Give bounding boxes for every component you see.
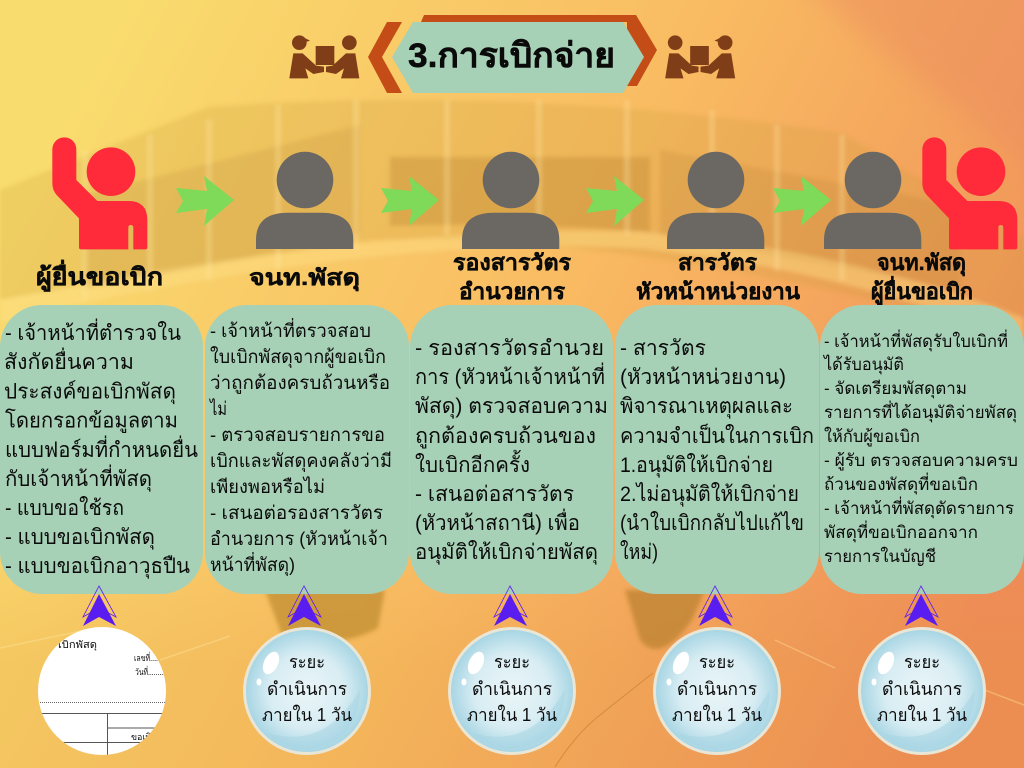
panel 2: supply officer: ไม่ [208, 398, 227, 419]
panel 5: officer and applicant: ได้รับอนุมัติ [822, 354, 904, 375]
form image circle [38, 627, 166, 760]
bubble 3 [654, 628, 780, 754]
panel 5: officer and applicant: - เจ้าหน้าที่พัสดุรับใบเบิกที่ [824, 329, 1008, 352]
icon: person superintendent [667, 152, 764, 249]
form image circle: เลขที่.... [134, 651, 158, 663]
heading 4 [636, 250, 800, 304]
panel 4: superintendent: (หัวหน้าหน่วยงาน) [620, 366, 786, 389]
bubble 3: ระยะ [699, 652, 735, 672]
heading 5: ผู้ยื่นขอเบิก [871, 275, 973, 306]
banner: left chevron [368, 22, 402, 93]
heading 5: จนท.พัสดุ [877, 250, 966, 277]
panel 5: officer and applicant: รายการที่ได้อนุมัติจ่ายพัสดุ [824, 400, 1017, 423]
panel 2: supply officer: - ตรวจสอบรายการขอ [210, 424, 385, 445]
panel 1: applicant: ประสงค์ขอเบิกพัสดุ [4, 380, 176, 404]
panel 2: supply officer: อำนวยการ (หัวหน้าเจ้า [210, 528, 388, 549]
panel 5: officer and applicant: - ผู้รับ ตรวจสอบความครบ [824, 451, 1018, 471]
panel 4: superintendent: 1.อนุมัติให้เบิกจ่าย [620, 453, 773, 478]
heading 3 [453, 250, 571, 304]
arrow 2 [381, 176, 439, 226]
heading 2: จนท.พัสดุ [249, 265, 360, 292]
panel 5: officer and applicant: - จัดเตรียมพัสดุตาม [824, 379, 967, 399]
form image circle: วันที่......... [135, 665, 165, 677]
bubble 2: ดำเนินการ [472, 679, 552, 699]
panel 2: supply officer: เบิกและพัสดุคงคลังว่ามี [210, 450, 392, 473]
icon: person officer [256, 152, 353, 249]
bubble 1: ภายใน 1 วัน [262, 704, 352, 725]
panel 1: applicant: - แบบขอเบิกพัสดุ [5, 526, 155, 550]
heading 4: หัวหน้าหน่วยงาน [636, 279, 800, 304]
heading 3: รองสารวัตร [453, 250, 571, 275]
panel 4: superintendent: - สารวัตร [620, 337, 706, 360]
bubble 1: ดำเนินการ [267, 679, 347, 699]
panel 3: deputy superintendent: ถูกต้องครบถ้วนของ [415, 425, 596, 449]
bubble 3: ดำเนินการ [677, 679, 757, 699]
panel 2: supply officer: - เสนอต่อรองสารวัตร [210, 502, 383, 523]
bubble 4 [860, 628, 984, 754]
panel 1: applicant: - แบบขอเบิกอาวุธปืน [5, 555, 190, 579]
arrow 4 [773, 176, 831, 226]
up arrow 2 [288, 586, 321, 626]
heading 4: สารวัตร [678, 250, 757, 275]
panel 3: deputy superintendent [410, 305, 613, 594]
panel 1: applicant: กับเจ้าหน้าที่พัสดุ [5, 464, 152, 492]
panel 4: superintendent: ใหม่) [620, 540, 658, 564]
up arrow 4 [699, 586, 732, 626]
panel 4: superintendent: ความจำเป็นในการเบิก [620, 422, 814, 448]
arrow 3 [586, 176, 644, 226]
up arrow 5 [905, 586, 938, 626]
panel 1: applicant: - เจ้าหน้าที่ตำรวจใน [5, 318, 181, 345]
panel 4: superintendent: 2.ไม่อนุมัติให้เบิกจ่าย [620, 482, 799, 507]
up arrow 1 [83, 586, 116, 626]
panel 2: supply officer: เพียงพอหรือไม่ [210, 476, 325, 497]
form image circle: ขอเบิ [131, 732, 151, 742]
panel 2: supply officer: ว่าถูกต้องครบถ้วนหรือ [210, 372, 390, 394]
bubble 2 [450, 628, 574, 754]
heading 5 [871, 250, 973, 306]
panel 3: deputy superintendent: การ (หัวหน้าเจ้าหน้าที่ [415, 362, 605, 389]
banner: mint hexagon [392, 22, 644, 93]
panel 1: applicant: แบบฟอร์มที่กำหนดยื่น [5, 435, 198, 462]
panel 5: officer and applicant: ถ้วนของพัสดุที่ขอเบิก [824, 472, 978, 495]
panel 4: superintendent: (นำใบเบิกกลับไปแก้ไข [620, 511, 804, 535]
icon: raised hand final [922, 137, 1017, 249]
bubble 3: ภายใน 1 วัน [672, 704, 762, 725]
panel 4: superintendent: พิจารณาเหตุผลและ [620, 395, 793, 419]
panel 2: supply officer [205, 305, 409, 594]
icon: raised hand applicant [52, 137, 147, 249]
panel 3: deputy superintendent: (หัวหน้าสถานี) เพื่อ [415, 508, 580, 535]
panel 3: deputy superintendent: - เสนอต่อสารวัตร [415, 483, 574, 506]
panel 2: supply officer: หน้าที่พัสดุ) [210, 552, 295, 577]
bubble 4: ดำเนินการ [882, 679, 962, 699]
icon: person deputy [462, 152, 559, 249]
panel 1: applicant: - แบบขอใช้รถ [5, 496, 124, 520]
title banner [368, 15, 657, 93]
heading 1: ผู้ยื่นขอเบิก [36, 259, 163, 292]
panel 4: superintendent [615, 305, 819, 594]
title: 3.การเบิกจ่าย [408, 37, 615, 75]
up arrow 3 [494, 586, 527, 626]
form image circle: เบิกพัสดุ [58, 640, 97, 651]
banner: orange chevron back [421, 15, 657, 86]
panel 1: applicant [0, 305, 203, 594]
bubble 2: ภายใน 1 วัน [467, 704, 557, 725]
arrow 1 [176, 176, 234, 226]
bubble 1: ระยะ [289, 652, 325, 672]
heading 3: อำนวยการ [459, 279, 565, 304]
panel 1: applicant: โดยกรอกข้อมูลตาม [5, 408, 178, 434]
bubble 4: ภายใน 1 วัน [877, 704, 967, 725]
panel 3: deputy superintendent: - รองสารวัตรอำนวย [415, 337, 604, 360]
bubble 2: ระยะ [494, 652, 530, 672]
panel 2: supply officer: ใบเบิกพัสดุจากผู้ขอเบิก [210, 346, 386, 369]
panel 5: officer and applicant: พัสดุที่ขอเบิกออกจาก [824, 520, 978, 543]
icon: person officer final [824, 152, 921, 249]
bubble 1 [244, 628, 370, 754]
panel 2: supply officer: - เจ้าหน้าที่ตรวจสอบ [210, 318, 371, 341]
panel 5: officer and applicant: ให้กับผู้ขอเบิก [824, 426, 920, 447]
bubble 4: ระยะ [904, 652, 940, 672]
panel 5: officer and applicant: - เจ้าหน้าที่พัสดุตัดรายการ [824, 496, 1014, 519]
panel 3: deputy superintendent: ใบเบิกอีกครั้ง [415, 450, 530, 477]
icon: delivery people left [289, 35, 359, 78]
panel 1: applicant: สังกัดยื่นความ [4, 347, 134, 374]
panel 3: deputy superintendent: อนุมัติให้เบิกจ่ายพัสดุ [415, 540, 598, 565]
panel 5: officer and applicant: รายการในบัญชี [824, 546, 936, 566]
icon: delivery people right [665, 35, 735, 78]
panel 3: deputy superintendent: พัสดุ) ตรวจสอบความ [415, 395, 608, 419]
panel 5: officer and applicant [820, 305, 1024, 594]
